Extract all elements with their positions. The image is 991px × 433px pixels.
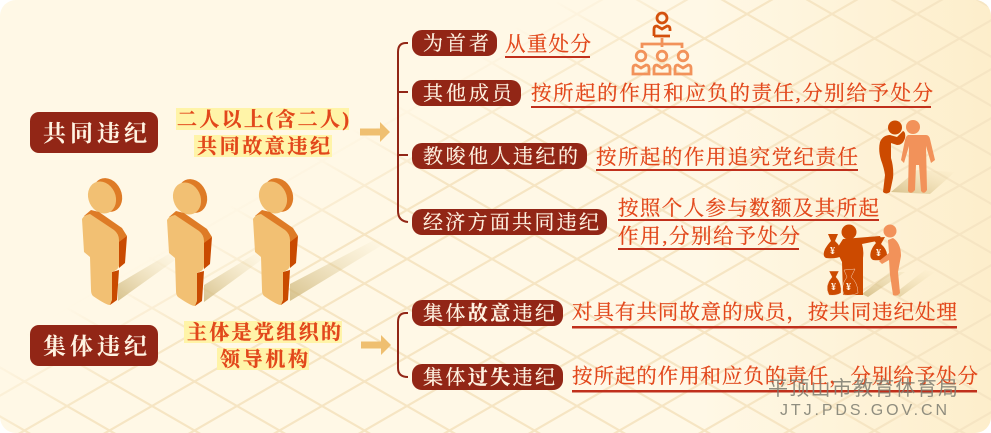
figure: person 1 xyxy=(82,173,128,305)
text block: economic joint violation: 按照个人参与数额及其所起 xyxy=(618,197,879,220)
watermark xyxy=(768,377,958,419)
icon: money exchange: ¥ xyxy=(830,246,835,257)
item: collective negligent: 按所起的作用和应负的责任，分别给予处分 xyxy=(572,365,978,388)
figures: three people xyxy=(82,173,384,306)
icon: money exchange xyxy=(824,224,935,297)
icon: money exchange: ¥ xyxy=(846,282,851,293)
arrow: joint xyxy=(360,122,390,142)
arrow: collective xyxy=(361,335,391,355)
item: instigators xyxy=(412,143,858,171)
figure: person 2 xyxy=(167,174,213,306)
item: other members: 按所起的作用和应负的责任,分别给予处分 xyxy=(531,82,933,105)
text block: economic joint violation: 作用,分别给予处分 xyxy=(618,225,800,248)
watermark: JTJ.PDS.GOV.CN xyxy=(780,402,947,419)
item: ringleader: 从重处分 xyxy=(505,33,591,56)
text block: two or more people xyxy=(176,108,349,158)
heading: collective violation xyxy=(30,325,158,366)
item: instigators: 按所起的作用追究党纪责任 xyxy=(596,146,858,169)
text block: economic joint violation: 经济方面共同违纪 xyxy=(423,211,599,234)
item: instigators: 教唆他人违纪的 xyxy=(423,145,578,168)
item: collective negligent: 集体过失违纪 xyxy=(423,366,555,389)
icon: team members xyxy=(633,38,691,74)
text block: subject is party organization xyxy=(184,321,342,371)
heading: collective violation: 集体违纪 xyxy=(43,334,147,359)
panel: collective violation xyxy=(30,321,391,371)
brackets xyxy=(398,43,408,377)
item: collective negligent xyxy=(412,364,978,392)
watermark: 平顶山市教育体育局 xyxy=(768,377,958,400)
icon: org chart xyxy=(633,13,691,74)
heading: joint violation: 共同违纪 xyxy=(43,121,147,146)
text block: economic joint violation xyxy=(412,197,879,250)
shadows xyxy=(118,238,384,302)
text block: two or more people: 共同故意违纪 xyxy=(197,134,330,158)
item: collective intentional: 集体故意违纪 xyxy=(423,301,555,325)
text block: two or more people: 二人以上(含二人) xyxy=(177,108,349,131)
item: ringleader xyxy=(412,30,591,58)
text block: subject is party organization: 领导机构 xyxy=(220,348,308,371)
figure: person 3 xyxy=(253,173,299,305)
item: other members: 其他成员 xyxy=(423,82,514,105)
panel: joint violation xyxy=(30,108,390,158)
item: collective intentional xyxy=(412,300,958,328)
item: ringleader: 为首者 xyxy=(423,32,489,55)
icon: money exchange: ¥ xyxy=(876,248,881,259)
heading: joint violation xyxy=(30,112,158,153)
icon: two people whispering xyxy=(879,120,955,194)
item: other members xyxy=(412,80,933,108)
item: collective intentional: 对具有共同故意的成员，按共同违纪处理 xyxy=(572,301,958,324)
text block: subject is party organization: 主体是党组织的 xyxy=(187,321,341,344)
icon: money exchange: ¥ xyxy=(831,282,836,293)
